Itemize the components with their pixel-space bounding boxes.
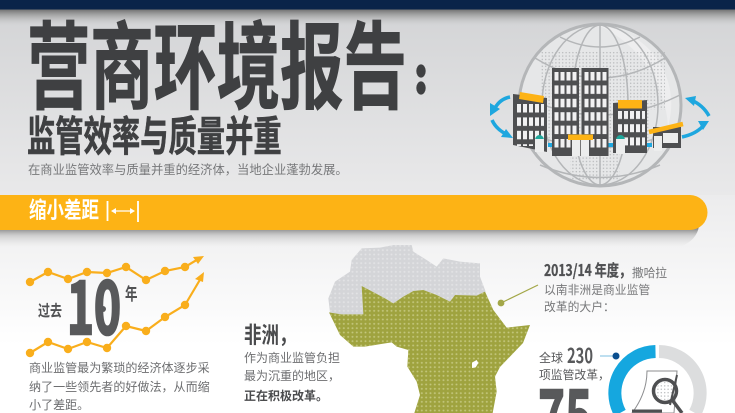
tall building (552, 68, 608, 156)
upper trend line (26, 256, 204, 286)
paragraph: narrowing gaps (29, 360, 210, 412)
chart: ten year trend lines (26, 256, 204, 357)
Sub-Saharan callout text: 改革的大户： (544, 300, 615, 314)
global reforms text: 全球 (539, 350, 563, 365)
global reforms text (538, 340, 610, 413)
top navy band (0, 0, 735, 10)
left building (513, 92, 547, 152)
subtitle: 监管效率与质量并重 (27, 114, 282, 160)
Africa text: 正在积极改革。 (244, 388, 328, 403)
section heading: 缩小差距 (29, 197, 99, 224)
map: Africa (328, 245, 530, 413)
rotation arrows (490, 96, 709, 145)
right building (613, 100, 647, 154)
paragraph: narrowing gaps: 商业监管最为繁琐的经济体逐步采 (29, 360, 210, 375)
leader line (600, 352, 620, 360)
globe (519, 24, 681, 186)
Africa text: 作为商业监管负担 (244, 350, 340, 365)
Africa text (244, 350, 340, 403)
global reforms text: 230 (567, 340, 593, 370)
Sub-Saharan callout text: 以南非洲是商业监管 (544, 283, 650, 297)
icon: document and magnifier (632, 371, 682, 413)
shop (649, 124, 683, 151)
callout line (498, 285, 538, 306)
Africa heading: 非洲， (244, 323, 296, 349)
description: 在商业监管效率与质量并重的经济体，当地企业蓬勃发展。 (28, 162, 348, 177)
sub-Saharan Africa (329, 286, 530, 413)
icon: gap arrows (108, 201, 138, 222)
big number 10: 10 (67, 251, 121, 355)
northern Africa (328, 245, 486, 314)
section bar shadow (0, 226, 699, 247)
Sub-Saharan callout text (544, 259, 667, 314)
title colon (416, 64, 426, 95)
paragraph: narrowing gaps: 纳了一些领先者的好做法，从而缩 (29, 379, 210, 394)
Africa text: 最为沉重的地区， (244, 368, 340, 383)
global reforms text: 项监管改革， (539, 368, 610, 382)
title: 营商环境报告 (27, 16, 407, 122)
section bar (0, 195, 708, 230)
paragraph: narrowing gaps: 小了差距。 (29, 398, 89, 412)
label: past: 过去 (38, 301, 62, 319)
donut chart (615, 352, 700, 413)
Sub-Saharan callout text: 撒哈拉 (632, 266, 667, 280)
Sub-Saharan callout text: 2013/14 年度， (544, 259, 631, 282)
lower trend line (26, 272, 204, 357)
label: years: 年 (125, 284, 138, 305)
icon: globe with buildings (490, 24, 709, 186)
